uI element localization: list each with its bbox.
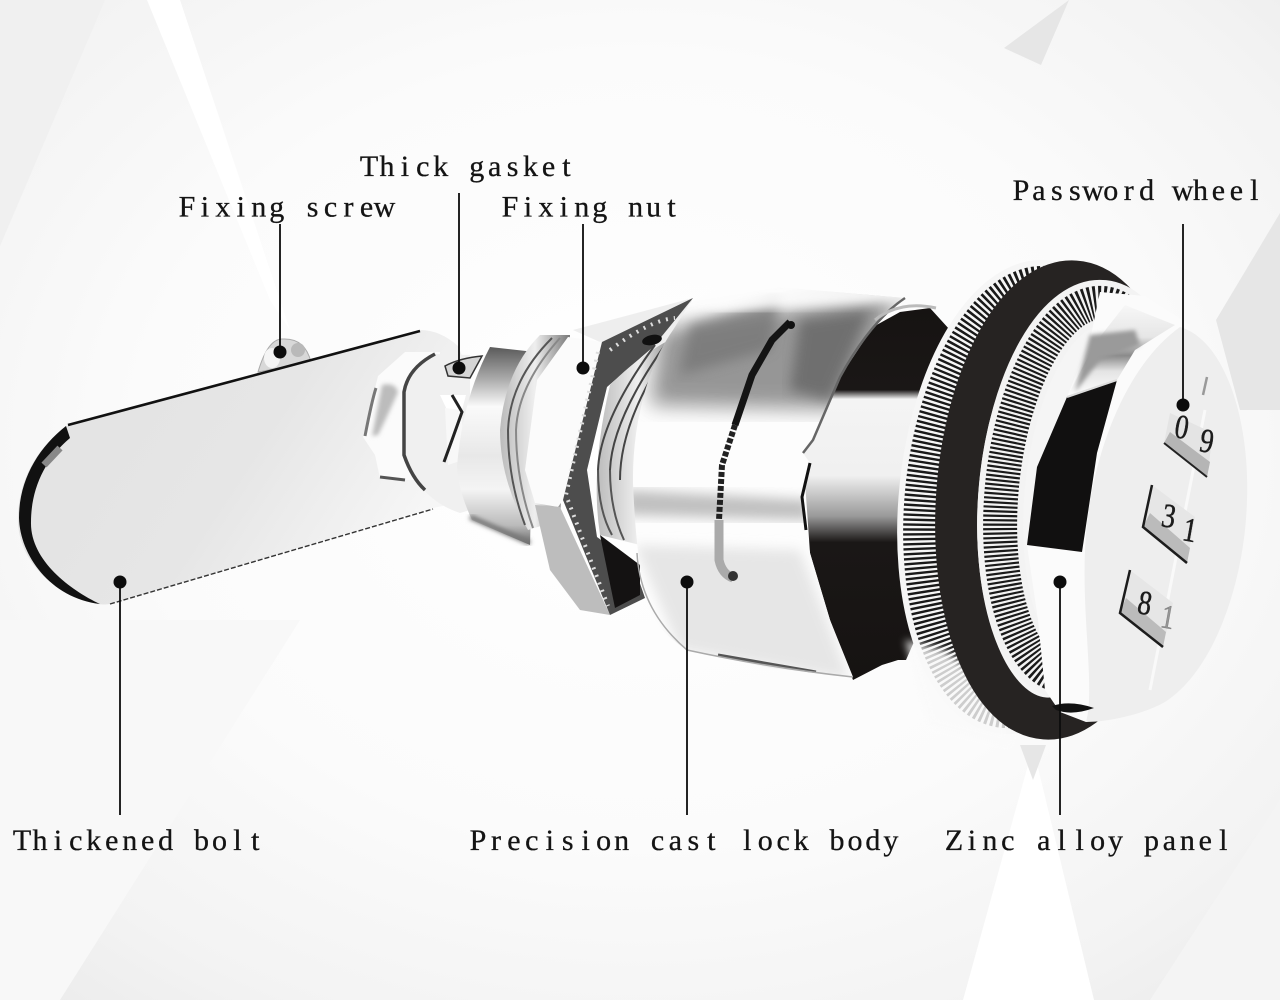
callout: thick gasket [360, 150, 571, 374]
fixing screw head [258, 339, 311, 372]
callout: thickened bolt [13, 576, 260, 857]
callout: thick gasket: Thick gasket [360, 150, 571, 183]
body slot [719, 321, 795, 581]
inner knurled ring [983, 294, 1185, 686]
wheel 31: 1 [1180, 510, 1200, 550]
wheel 09: 0 [1172, 407, 1192, 447]
bolt star cutout and hex head [363, 352, 482, 513]
callout: fixing nut [502, 190, 676, 374]
wheel 81: 1 [1158, 597, 1178, 637]
thread in front of nut [597, 335, 680, 545]
password wheel digits [1120, 407, 1217, 647]
callout: zinc alloy panel: Zinc alloy panel [945, 824, 1227, 857]
callout: precision cast lock body [470, 576, 898, 857]
wheel 09 [1164, 407, 1217, 477]
inside of cut-away body [803, 308, 950, 680]
callout: fixing screw [179, 190, 396, 358]
callout: fixing screw: Fixing screw [179, 190, 396, 224]
hub collar [457, 347, 535, 545]
callout: zinc alloy panel [945, 576, 1227, 857]
zinc alloy panel face [1052, 327, 1247, 722]
front cylinder [1027, 292, 1190, 722]
callout: password wheel: Password wheel [1013, 174, 1259, 207]
wheel 81 [1120, 570, 1178, 647]
black rubber ring [935, 260, 1130, 740]
outer knurled ring [900, 272, 1150, 745]
wheel 81: 8 [1135, 583, 1155, 623]
fixing nut [525, 298, 693, 615]
thread behind nut [500, 335, 570, 530]
bolt [18, 330, 482, 604]
precision cast lock body [620, 275, 936, 685]
callout: fixing nut: Fixing nut [502, 190, 676, 224]
callout: password wheel [1013, 174, 1259, 412]
callout: precision cast lock body: Precision cast lock body [470, 824, 898, 857]
wheel 31 [1143, 485, 1200, 563]
wheel 09: 9 [1197, 421, 1217, 461]
callout: thickened bolt: Thickened bolt [13, 824, 260, 857]
wheel 31: 3 [1159, 496, 1179, 536]
